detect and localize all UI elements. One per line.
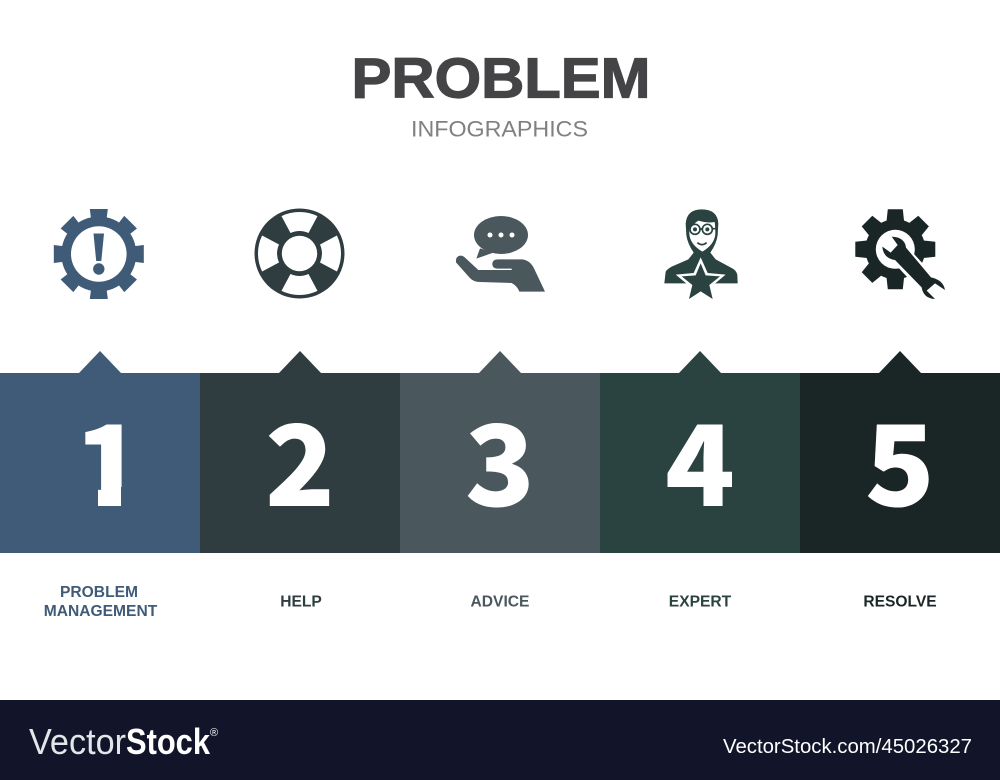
icon: gear with exclamation mark	[54, 209, 144, 299]
label: problem management: PROBLEM	[60, 584, 138, 601]
number 1: 1	[74, 377, 144, 539]
pointer and band 3	[400, 351, 600, 553]
footer logo: ®	[210, 727, 218, 739]
step 1: problem management	[0, 209, 200, 620]
icon: expert with glasses and star	[664, 209, 738, 302]
pointer and band 1	[0, 351, 200, 553]
footer logo: Vector	[29, 721, 126, 762]
number 2: 2	[265, 377, 335, 539]
icon: life buoy	[254, 208, 344, 298]
label: advice: ADVICE	[471, 594, 529, 610]
number 4: 4	[665, 377, 735, 539]
number 5: 5	[865, 377, 935, 539]
footer bar	[0, 700, 1000, 780]
number 3: 3	[465, 377, 535, 539]
label: help: HELP	[280, 594, 322, 610]
icon: gear with wrench	[855, 209, 945, 299]
pointer and band 5	[800, 351, 1000, 553]
subtitle: INFOGRAPHICS	[411, 116, 588, 142]
footer logo	[29, 721, 218, 762]
label: resolve: RESOLVE	[863, 594, 937, 610]
title: PROBLEM	[352, 46, 650, 110]
step 5: resolve	[800, 209, 1000, 611]
icon: speech bubble over open hand	[456, 216, 545, 292]
footer image id: VectorStock.com/45026327	[723, 736, 972, 758]
footer logo: Stock	[126, 721, 211, 762]
label: expert: EXPERT	[669, 594, 732, 610]
step 4: expert	[600, 209, 800, 610]
pointer and band 4	[600, 351, 800, 553]
step 3: advice	[400, 216, 600, 610]
pointer and band 2	[200, 351, 400, 553]
label: problem management: MANAGEMENT	[44, 603, 158, 620]
step 2: help	[200, 208, 400, 610]
